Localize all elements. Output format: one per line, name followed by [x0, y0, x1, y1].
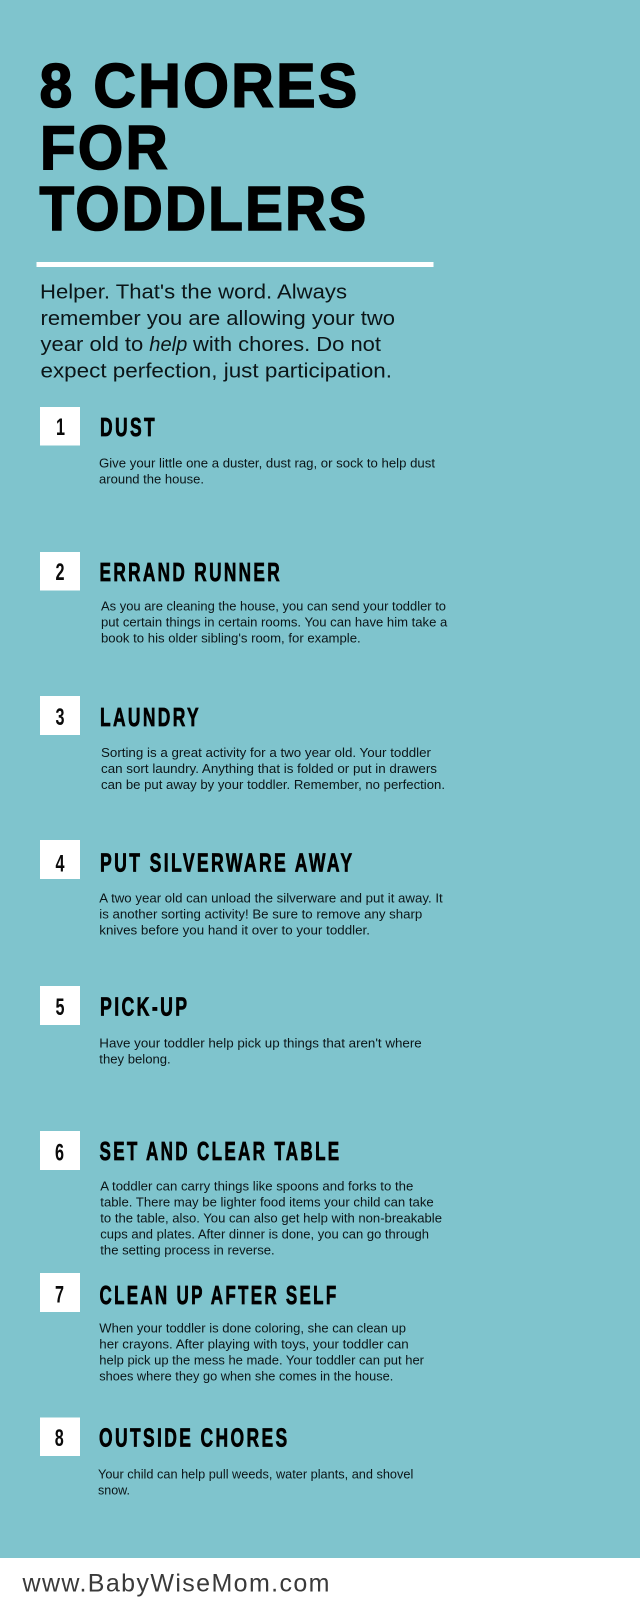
intro text: Helper. That's the word. Always	[40, 280, 347, 303]
panel: chore 3 laundry: 3	[56, 704, 64, 731]
panel: chore 8 outside chores: Your child can help pull weeds, water plants, and shovel	[98, 1466, 413, 1481]
panel: chore 2 errand runner: 2	[56, 559, 64, 586]
intro text: help	[149, 333, 187, 356]
panel: chore 7 clean up after self: 7	[55, 1282, 64, 1309]
title: FOR	[40, 114, 170, 183]
panel: chore 7 clean up after self: shoes where they go when she comes in the house.	[99, 1369, 393, 1384]
panel: chore 1 dust	[40, 407, 435, 487]
panel: chore 4 put silverware away: is another sorting activity! Be sure to remove any sharp	[99, 906, 422, 921]
panel: chore 7 clean up after self: her crayons. After playing with toys, your toddler can	[99, 1337, 409, 1352]
panel: chore 4 put silverware away: PUT SILVERWARE AWAY	[100, 848, 354, 878]
panel: chore 4 put silverware away: knives before you hand it over to your toddler.	[99, 922, 370, 937]
panel: chore 3 laundry	[40, 696, 445, 792]
panel: chore 6 set and clear table: the setting process in reverse.	[100, 1242, 275, 1257]
panel: chore 8 outside chores: OUTSIDE CHORES	[99, 1423, 290, 1453]
panel: chore 8 outside chores: snow.	[98, 1482, 130, 1497]
panel: chore 6 set and clear table: SET AND CLEAR TABLE	[100, 1136, 342, 1166]
intro text: remember you are allowing your two	[40, 307, 395, 330]
panel: chore 5 pick-up: they belong.	[99, 1051, 171, 1066]
panel: chore 7 clean up after self: help pick up the mess he made. Your toddler can put her	[99, 1353, 425, 1368]
panel: chore 2 errand runner: book to his older sibling's room, for example.	[101, 630, 361, 645]
title: TODDLERS	[40, 175, 368, 244]
panel: chore 6 set and clear table: to the table, also. You can also get help with non-breakable	[100, 1210, 442, 1225]
panel: chore 5 pick-up: PICK-UP	[100, 992, 190, 1022]
panel: chore 7 clean up after self: When your toddler is done coloring, she can clean up	[99, 1321, 406, 1336]
footer bar: www.BabyWiseMom.com	[22, 1570, 330, 1598]
panel: chore 3 laundry: can sort laundry. Anything that is folded or put in drawers	[101, 761, 437, 776]
panel: chore 1 dust: around the house.	[99, 472, 204, 487]
panel: chore 5 pick-up: Have your toddler help pick up things that aren't where	[99, 1035, 422, 1050]
panel: chore 5 pick-up: 5	[56, 994, 64, 1021]
title	[40, 52, 368, 244]
panel: chore 8 outside chores: 8	[55, 1425, 64, 1452]
panel: chore 3 laundry: Sorting is a great activity for a two year old. Your toddler	[101, 745, 432, 760]
panel: chore 6 set and clear table: 6	[55, 1140, 64, 1167]
intro text: with chores. Do not	[192, 333, 381, 356]
panel: chore 4 put silverware away: A two year old can unload the silverware and put it away. It	[99, 890, 443, 905]
panel: chore 6 set and clear table: A toddler can carry things like spoons and forks to the	[100, 1178, 413, 1193]
panel: chore 4 put silverware away: 4	[56, 851, 65, 878]
panel: chore 6 set and clear table	[40, 1131, 442, 1257]
panel: chore 5 pick-up	[40, 986, 422, 1066]
intro text	[40, 280, 395, 383]
panel: chore 2 errand runner: put certain things in certain rooms. You can have him take a	[101, 614, 448, 629]
panel: chore 6 set and clear table: cups and plates. After dinner is done, you can go through	[100, 1226, 429, 1241]
panel: chore 1 dust: Give your little one a duster, dust rag, or sock to help dust	[99, 456, 435, 471]
footer bar	[0, 1558, 640, 1600]
intro text: year old to	[40, 333, 143, 356]
panel: chore 8 outside chores	[40, 1418, 413, 1497]
panel: chore 2 errand runner: ERRAND RUNNER	[100, 557, 282, 587]
panel: chore 1 dust: 1	[56, 414, 65, 441]
panel: chore 3 laundry: can be put away by your toddler. Remember, no perfection.	[101, 777, 445, 792]
panel: chore 7 clean up after self: CLEAN UP AFTER SELF	[100, 1280, 338, 1310]
panel: chore 1 dust: DUST	[100, 412, 157, 442]
panel: chore 4 put silverware away	[40, 840, 443, 937]
panel: chore 7 clean up after self	[40, 1273, 425, 1384]
panel: chore 2 errand runner	[40, 552, 448, 645]
intro text: expect perfection, just participation.	[40, 360, 392, 383]
panel: chore 2 errand runner: As you are cleaning the house, you can send your toddler to	[101, 598, 446, 613]
panel: chore 6 set and clear table: table. There may be lighter food items your child can take	[100, 1194, 434, 1209]
title: 8 CHORES	[40, 52, 360, 121]
panel: chore 3 laundry: LAUNDRY	[100, 702, 201, 732]
